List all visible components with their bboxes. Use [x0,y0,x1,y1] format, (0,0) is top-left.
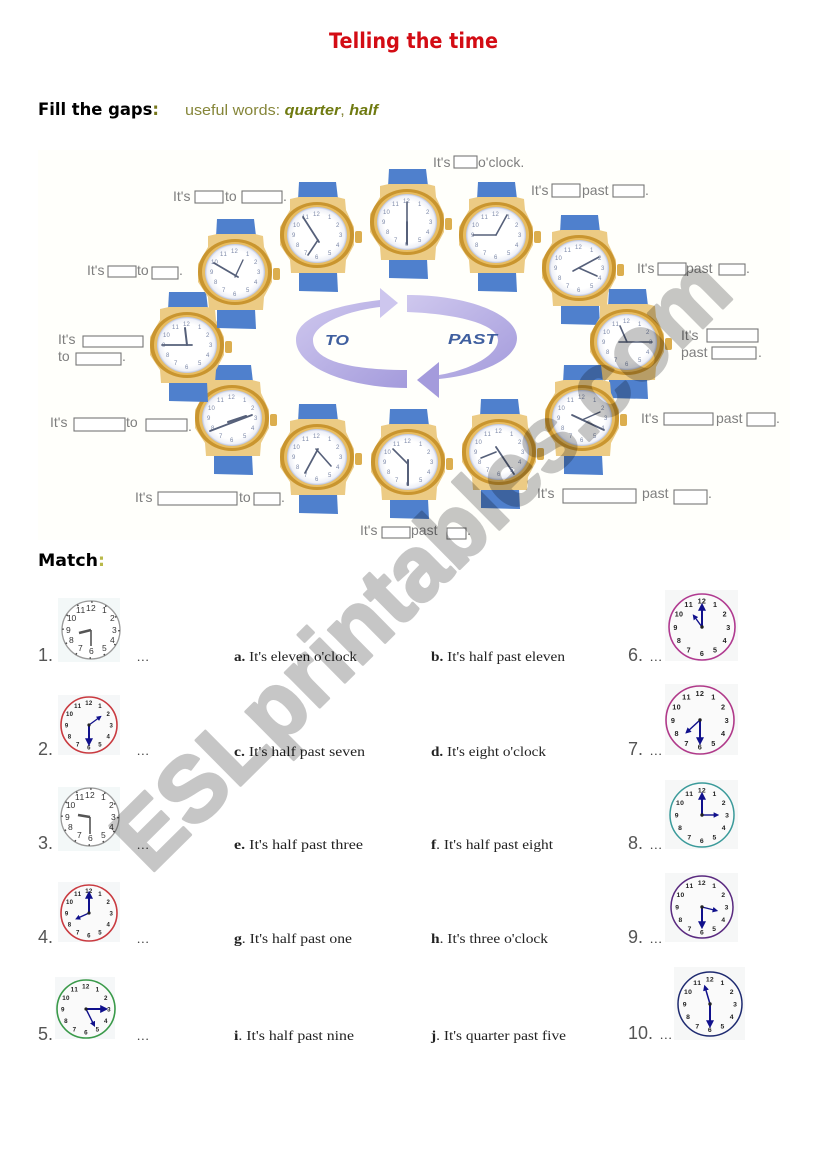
clock 2: 123456789101112 [65,701,113,752]
gap label: past row 4: It's [641,410,658,426]
clock 4: 123456789101112 [65,889,113,940]
watch: upper right 1 [459,182,541,292]
watch: right: 123456789101112 [602,319,653,368]
row numbers left: ... [137,931,150,946]
watch: lower right 2 [545,365,627,475]
watch: lower left 1 [280,404,362,514]
gap label: to row 2: . [179,262,183,278]
label: past: PAST [448,331,499,348]
clock 1: 123456789101112 [66,603,117,656]
gap label: to row 3: . [122,348,126,364]
matching sentences, left column: g. It's half past one [234,932,352,947]
matching sentences, left column: c. It's half past seven [234,745,365,760]
gap label: past row 4: past [716,410,743,426]
gap label: past row 2: past [686,260,713,276]
gap label: to row 1: It's [173,188,190,204]
gap label: to row 4: to [126,414,138,430]
row numbers left [38,645,150,1044]
row numbers right: 6. [628,645,643,665]
gap label: past row 5 [537,485,712,504]
gap label: to row 3: to [58,348,70,364]
gap label: past row 5: past [642,485,669,501]
label: to: TO [325,332,349,349]
matching sentences, right column: d. It's eight o'clock [431,745,546,760]
clock 7: 123456789101112 [671,689,729,752]
watch: left: 123456789101112 [162,322,213,371]
title: Telling the time [329,29,498,53]
watch: upper right 2 [542,215,624,325]
gap label: bottom: past [411,522,438,538]
gap label: bottom: It's [360,522,377,538]
gap label: past row 2: . [746,260,750,276]
watch: upper left 1: 123456789101112 [292,212,343,261]
gap label: past row 5: . [708,485,712,501]
watch: lower right 1: 123456789101112 [474,429,525,478]
clock 7 [665,684,738,755]
clock 9: 123456789101112 [675,880,729,936]
watch: upper right 1: 123456789101112 [471,212,522,261]
row numbers right: 8. [628,833,643,853]
gap label: past row 1 [531,182,649,198]
watch: top [370,169,452,279]
gap label: to row 1: . [283,188,287,204]
matching sentences, left column: e. It's half past three [234,838,363,853]
picture background [38,150,790,540]
gap label: bottom: . [467,522,471,538]
gap label: to row 4: . [188,418,192,434]
gap label: to row 5: to [239,489,251,505]
row numbers left: 2. [38,739,53,759]
clock 9 [665,873,738,942]
watch: upper left 2: 123456789101112 [210,249,261,298]
watch: top: 123456789101112 [382,199,433,248]
row numbers right: 9. [628,927,643,947]
watch: lower right 2: 123456789101112 [557,395,608,444]
watch: upper left 1 [280,182,362,292]
row numbers left: 5. [38,1024,53,1044]
clock 10: 123456789101112 [683,976,737,1034]
gap label: past row 4 [641,410,780,426]
matching sentences, right column: b. It's half past eleven [431,650,565,665]
row numbers left: ... [137,743,150,758]
panel: watch picture [38,150,790,540]
watch: upper right 2: 123456789101112 [554,245,605,294]
matching sentences, right column: j. It's quarter past five [430,1029,566,1044]
row numbers right: ... [650,837,663,852]
row numbers right [628,645,673,1043]
gap label: to row 1 [173,188,287,204]
clock 3: 123456789101112 [65,790,116,843]
clock 5: 123456789101112 [61,983,111,1036]
row numbers right: 7. [628,739,643,759]
row numbers left: ... [137,649,150,664]
gap label: to row 2 [87,262,183,279]
gap label: past row 5: It's [537,485,554,501]
row numbers left: ... [137,1028,150,1043]
watch: bottom [371,409,453,519]
gap label: past row 1: past [582,182,609,198]
watch: lower right 1 [462,399,544,509]
row numbers left: 4. [38,927,53,947]
clock 8: 123456789101112 [675,787,729,845]
watch: left [150,292,232,402]
arrow: to [296,288,407,388]
row numbers left: 3. [38,833,53,853]
watch: right [590,289,672,399]
matching sentences, left column: a. It's eleven o'clock [234,650,357,665]
clock 6 [665,590,738,661]
gap label: to row 4: It's [50,414,67,430]
watch: lower left 2 [195,365,277,475]
matching sentences, left column: i. It's half past nine [234,1029,354,1044]
row numbers right: ... [650,931,663,946]
gap label: to row 3 [58,331,143,365]
gap label: to row 4 [50,414,192,434]
gap label: past row 2 [637,260,750,276]
gap label: 12 o'clock [433,154,524,170]
row numbers right: 10. [628,1023,653,1043]
gap label: to row 5: . [281,489,285,505]
gap label: past row 1: . [645,182,649,198]
clock 1 [58,598,120,662]
gap label: to row 5: It's [135,489,152,505]
gap label: bottom [360,522,471,539]
row numbers left: 1. [38,645,53,665]
gap label: to row 5 [135,489,285,505]
heading: match: Match: [38,551,105,571]
clock 3 [58,787,120,851]
watch: upper left 2 [198,219,280,329]
gap label: to row 2: to [137,262,149,278]
gap label: past row 2: It's [637,260,654,276]
gap label: past row 1: It's [531,182,548,198]
matching sentences, left column [234,650,365,1044]
matching sentences, right column: f. It's half past eight [431,838,553,853]
row numbers right: ... [660,1027,673,1042]
matching sentences, right column: h. It's three o'clock [431,932,548,947]
row numbers left: ... [137,837,150,852]
gap label: to row 2: It's [87,262,104,278]
useful words hint: useful words: quarter , half [185,103,380,119]
gap label: to row 1: to [225,188,237,204]
arrow: past [407,295,517,398]
watch: bottom: 123456789101112 [383,439,434,488]
clock 6: 123456789101112 [673,597,730,658]
gap label: 12 o'clock: It's [433,154,450,170]
heading: fill the gaps: Fill the gaps: [38,100,159,120]
gap label: past row 3 [681,327,762,360]
gap label: past row 3: . [758,344,762,360]
watch: lower left 1: 123456789101112 [292,434,343,483]
clock 2 [58,695,120,755]
row numbers right: ... [650,743,663,758]
clock 8 [665,780,738,849]
watermark: ESLprintables.com [92,237,750,889]
gap label: past row 3: It's [681,327,698,343]
row numbers right: ... [650,649,663,664]
matching sentences, right column [430,650,566,1044]
watch: lower left 2: 123456789101112 [207,395,258,444]
gap label: to row 3: It's [58,331,75,347]
gap label: 12 o'clock: o'clock. [478,154,524,170]
gap label: past row 4: . [776,410,780,426]
clock 4 [58,882,120,942]
gap label: past row 3: past [681,344,708,360]
clock 10 [674,967,745,1040]
